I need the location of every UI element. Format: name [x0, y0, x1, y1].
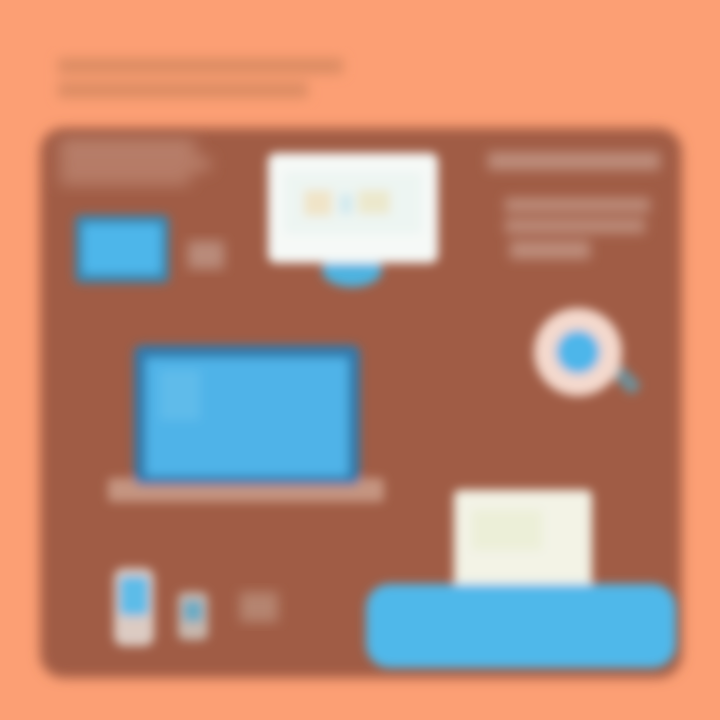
panel: main	[40, 128, 682, 678]
icon: monitor	[268, 153, 438, 287]
icon: magnifier	[534, 308, 642, 396]
icon: laptop	[108, 345, 384, 502]
icon: small blue screen	[75, 215, 169, 283]
title	[58, 58, 343, 98]
icon: small laptop with blue base	[366, 490, 676, 668]
small label	[240, 592, 278, 622]
text block: top right	[488, 152, 660, 259]
icon: phones	[114, 568, 208, 646]
small label	[188, 241, 224, 269]
text block: top left	[60, 140, 210, 184]
